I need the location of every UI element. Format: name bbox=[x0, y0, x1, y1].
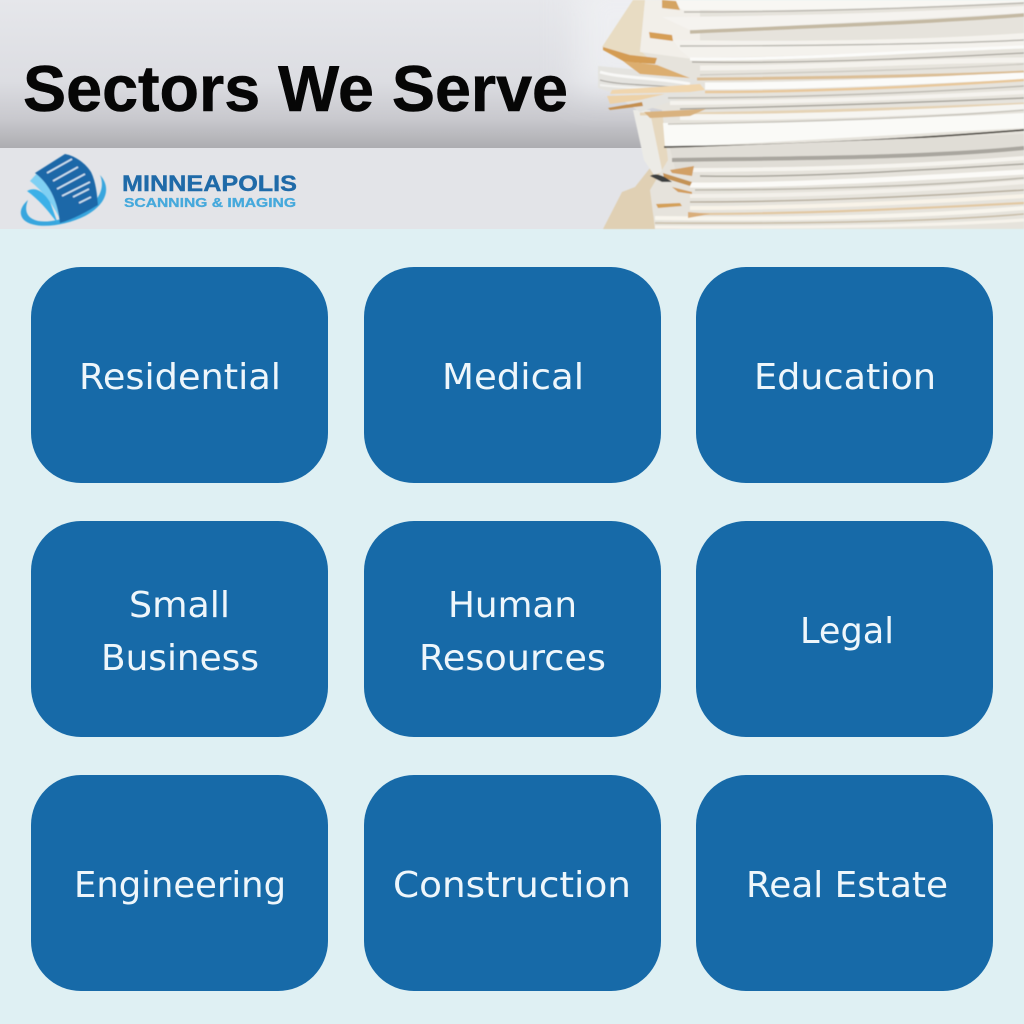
logo tagline: SCANNING & IMAGING bbox=[124, 195, 296, 210]
photo: stack of paper files bbox=[598, 0, 1024, 229]
panel: Small Business: Small bbox=[129, 585, 230, 626]
panel: Construction bbox=[364, 775, 661, 991]
panel: Real Estate bbox=[696, 775, 993, 991]
folder backing bottom bbox=[603, 168, 700, 229]
logo icon bbox=[21, 154, 106, 226]
left loose sheets bbox=[598, 66, 700, 112]
folder backing top bbox=[602, 0, 700, 60]
panel: Legal bbox=[696, 521, 993, 737]
panel: Engineering bbox=[31, 775, 328, 991]
company logo bbox=[21, 154, 297, 226]
panel: Medical: Medical bbox=[442, 357, 584, 398]
upper sheets bbox=[640, 0, 700, 60]
panel: Small Business: Business bbox=[101, 638, 259, 679]
panel: Small Business bbox=[31, 521, 328, 737]
panel: Residential bbox=[31, 267, 328, 483]
header banner bbox=[0, 0, 680, 229]
folder spine bbox=[633, 110, 668, 175]
dark clip bbox=[650, 174, 672, 182]
paper block bbox=[640, 0, 1024, 229]
panel: Engineering: Engineering bbox=[74, 865, 286, 906]
panel: Education: Education bbox=[754, 357, 936, 398]
orange file tabs bbox=[603, 47, 657, 64]
logo wordmark: MINNEAPOLIS bbox=[122, 171, 297, 196]
panel: Human Resources: Human bbox=[448, 585, 577, 626]
title: Sectors We Serve bbox=[23, 52, 568, 125]
panel: Legal: Legal bbox=[800, 611, 894, 652]
panel: Human Resources: Resources bbox=[419, 638, 606, 679]
panel: Medical bbox=[364, 267, 661, 483]
lower sheets bbox=[670, 134, 1024, 172]
panel: Human Resources bbox=[364, 521, 661, 737]
panel: Construction: Construction bbox=[393, 865, 631, 906]
panel: Residential: Residential bbox=[79, 357, 281, 398]
panel: Real Estate: Real Estate bbox=[746, 865, 948, 906]
panel: Education bbox=[696, 267, 993, 483]
